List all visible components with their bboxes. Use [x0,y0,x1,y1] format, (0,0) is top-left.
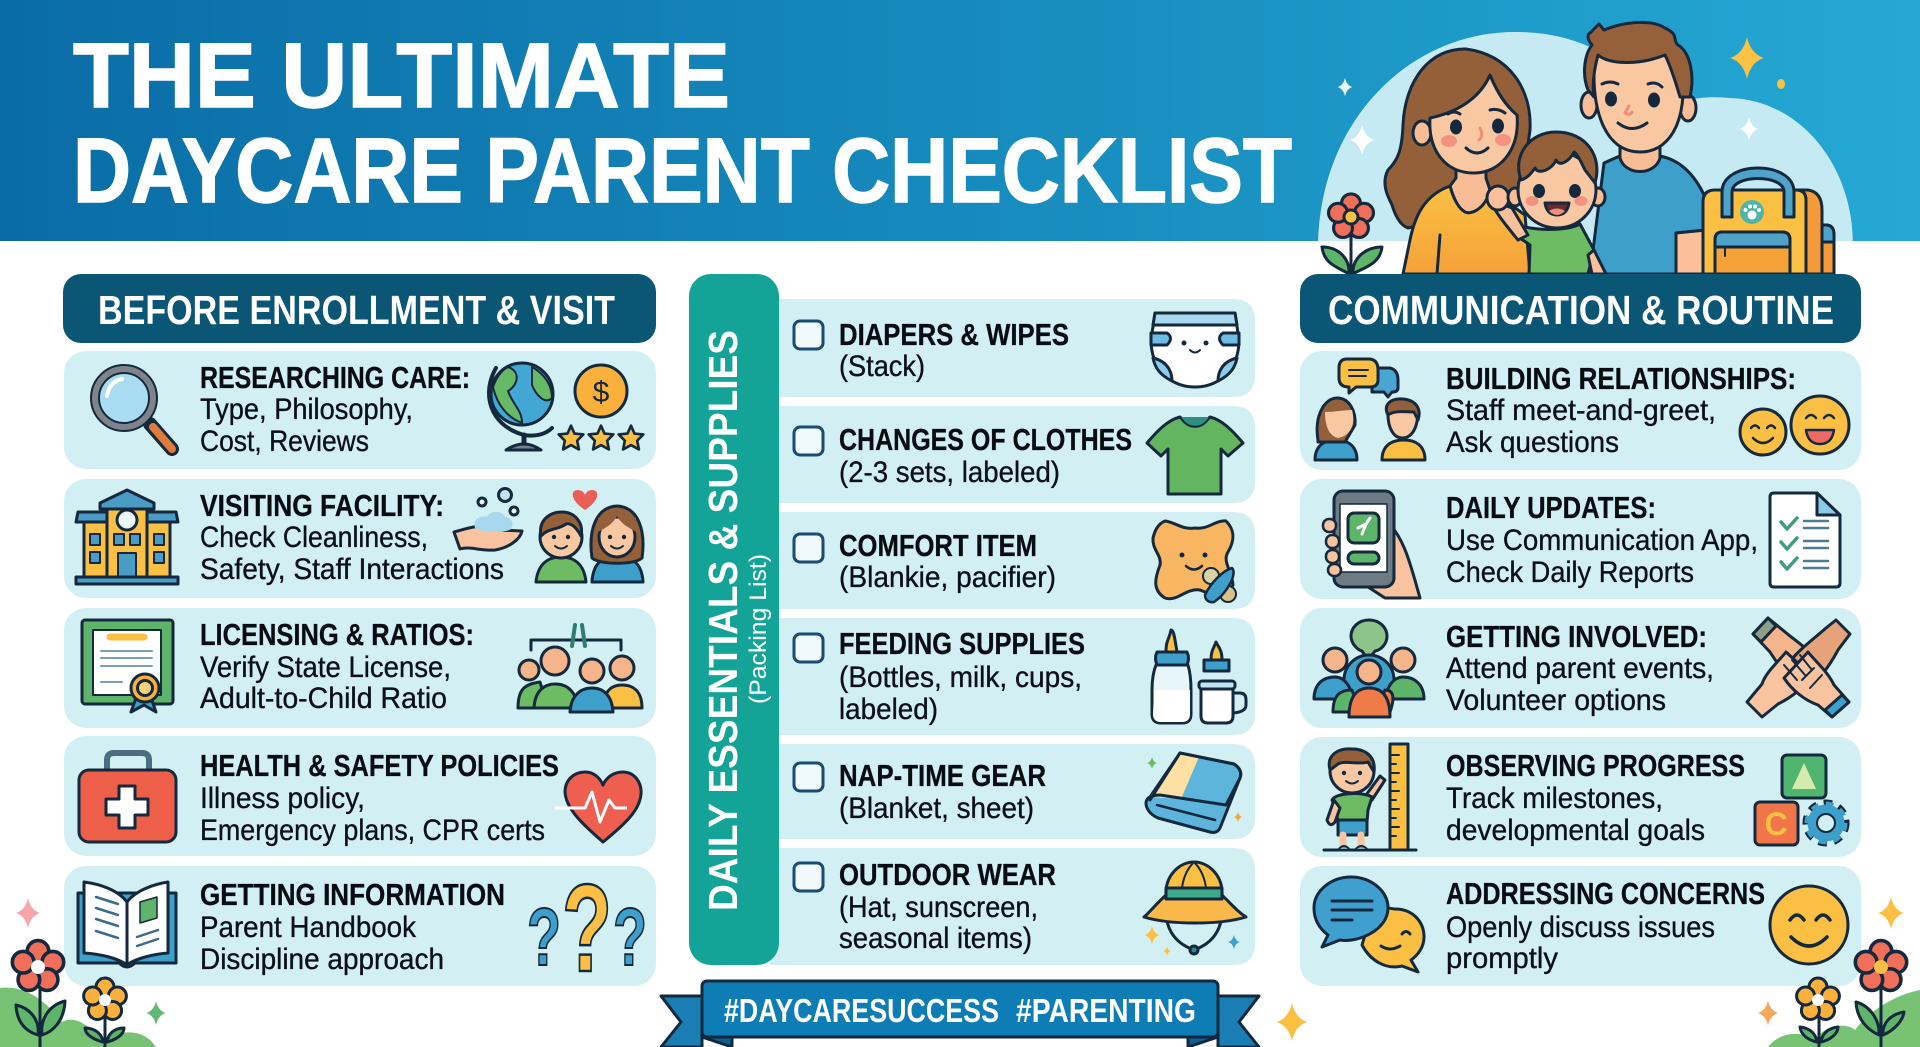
card: visiting facility [64,479,656,598]
icon: folded blanket [1146,753,1241,832]
card: daily updates [1300,479,1861,599]
card text: OBSERVING PROGRESS [1446,749,1745,783]
item: nap-time gear [839,759,1046,825]
card text: Check Cleanliness, [200,521,428,554]
item: comfort item: COMFORT ITEM [839,529,1037,563]
icon: globe [489,363,553,450]
item: diapers and wipes [839,318,1069,383]
card text: Volunteer options [1446,684,1666,717]
item: outdoor wear: (Hat, sunscreen, [839,891,1038,924]
card text: GETTING INFORMATION [200,878,505,912]
icon: blocks and gear [1755,755,1844,845]
card text: Check Daily Reports [1446,556,1694,589]
checkboxes [794,321,823,891]
title [73,25,1292,222]
card text: ADDRESSING CONCERNS [1446,877,1765,911]
item: diapers and wipes: DIAPERS & WIPES [839,318,1069,352]
icon: blankie and pacifier [1153,521,1236,602]
card text [200,878,505,976]
card text: Use Communication App, [1446,524,1758,557]
icon: washing hand with bubbles [454,488,522,550]
decoration: bottom-right flowers [1758,897,1920,1047]
icon: school building [76,490,178,584]
card text: RESEARCHING CARE: [200,361,470,395]
column heading [1300,274,1861,343]
item: changes of clothes [839,423,1132,489]
title: DAYCARE PARENT CHECKLIST [73,120,1292,222]
card text: BUILDING RELATIONSHIPS: [1446,362,1796,396]
card text: Safety, Staff Interactions [200,553,504,586]
item: comfort item [839,529,1056,594]
card text [1446,620,1714,717]
icon: question marks: ? [527,892,561,983]
card text [200,361,470,458]
column: daily essentials and supplies [689,274,1255,965]
flower [1322,194,1382,274]
mom [1385,49,1530,274]
dad [1581,22,1706,274]
card text: Cost, Reviews [200,425,369,458]
column heading: BEFORE ENROLLMENT & VISIT [98,287,615,333]
icon: question marks [527,860,647,998]
item: changes of clothes: CHANGES OF CLOTHES [839,423,1132,457]
icon: first aid kit [79,753,176,842]
card text: Staff meet-and-greet, [1446,394,1716,427]
icon: stacked hands [1747,618,1850,717]
card: health and safety policies [64,736,656,856]
column: before enrollment and visit [63,274,656,998]
card text [1446,749,1745,847]
card text: Ask questions [1446,426,1619,459]
item: outdoor wear: OUTDOOR WEAR [839,858,1056,892]
card text: HEALTH & SAFETY POLICIES [200,749,559,783]
item: diapers and wipes: (Stack) [839,350,925,383]
card text: Track milestones, [1446,782,1663,815]
item: nap-time gear: NAP-TIME GEAR [839,759,1046,793]
item: comfort item: (Blankie, pacifier) [839,561,1056,594]
icon: smiley face [1770,886,1848,964]
card text: Illness policy, [200,782,365,815]
icon: phone in hand [1323,491,1420,598]
header banner [0,0,1920,241]
item: feeding supplies [839,627,1085,726]
card: getting information [64,860,656,998]
column heading [63,274,656,343]
backpack [1703,168,1834,274]
icon: two people talking [1315,359,1425,460]
card text [1446,877,1765,975]
card text: developmental goals [1446,814,1705,847]
card text: Type, Philosophy, [200,393,413,426]
vertical section heading: (Packing List) [745,554,772,704]
card: researching care [64,351,656,469]
icon: dollar coin [575,365,627,417]
card text [200,749,559,847]
icon: checklist document [1770,493,1840,587]
icon: open handbook [78,882,176,967]
card: observing progress [1300,737,1861,857]
item: changes of clothes: (2-3 sets, labeled) [839,456,1060,489]
illustration: family with backpack [1300,22,1860,275]
item: feeding supplies: labeled) [839,693,938,726]
icon: diaper [1151,313,1239,387]
card text [1446,362,1796,459]
hashtag ribbon: #DAYCARESUCCESS [724,992,999,1029]
card: getting involved [1300,608,1861,728]
icon: child with height ruler [1324,744,1416,850]
decoration: bottom-left flowers [0,898,166,1047]
card text: Verify State License, [200,651,451,684]
icon: certificate with rosette [82,620,173,712]
card text: promptly [1446,942,1558,975]
icon: sun hat with sparkles [1144,862,1246,956]
card text: VISITING FACILITY: [200,489,444,523]
hashtag ribbon [661,981,1259,1047]
icon: chat bubbles [1314,877,1424,972]
card text: Parent Handbook [200,911,416,944]
column: communication and routine [1300,274,1861,986]
icon: parent group [1314,620,1424,717]
icon: question marks: ? [613,892,647,983]
card text: DAILY UPDATES: [1446,491,1656,525]
card text: LICENSING & RATIOS: [200,618,474,652]
checklist rows [770,299,1255,965]
icon: question marks: ? [562,860,612,998]
card text: Adult-to-Child Ratio [200,682,447,715]
icon: three stars [559,426,643,449]
item: feeding supplies: (Bottles, milk, cups, [839,661,1082,694]
icon: group of adults and children [518,625,642,712]
item: outdoor wear [839,858,1056,955]
vertical section heading: DAILY ESSENTIALS & SUPPLIES [700,330,746,911]
icon: magnifying glass [95,369,172,449]
child [1487,132,1606,274]
icon: blocks and gear: C [1764,806,1788,842]
icon: dollar coin: $ [593,376,610,409]
card: addressing concerns [1300,866,1861,986]
item: nap-time gear: (Blanket, sheet) [839,792,1034,825]
icon: two smiley faces [1740,396,1849,455]
sparkles around blanket [1147,757,1242,822]
vertical section heading [689,274,779,965]
title: THE ULTIMATE [73,25,730,127]
card text [200,618,474,715]
card text: Openly discuss issues [1446,911,1715,944]
card: licensing and ratios [64,608,656,728]
item: feeding supplies: FEEDING SUPPLIES [839,627,1085,661]
card text [1446,491,1758,589]
item: outdoor wear: seasonal items) [839,922,1032,955]
card text: GETTING INVOLVED: [1446,620,1707,654]
column heading: COMMUNICATION & ROUTINE [1328,287,1834,333]
card text: Emergency plans, CPR certs [200,814,545,847]
icon: child and staff [536,490,643,582]
card text [200,489,504,586]
card: building relationships [1300,351,1861,470]
icon: t-shirt [1147,417,1243,494]
icon: baby bottle and cup [1152,630,1246,723]
hashtag ribbon: #PARENTING [1016,992,1196,1029]
card text: Discipline approach [200,943,444,976]
sparkle near ribbon [1277,1003,1307,1041]
card text: Attend parent events, [1446,652,1714,685]
icon: heart with pulse line [555,772,641,842]
